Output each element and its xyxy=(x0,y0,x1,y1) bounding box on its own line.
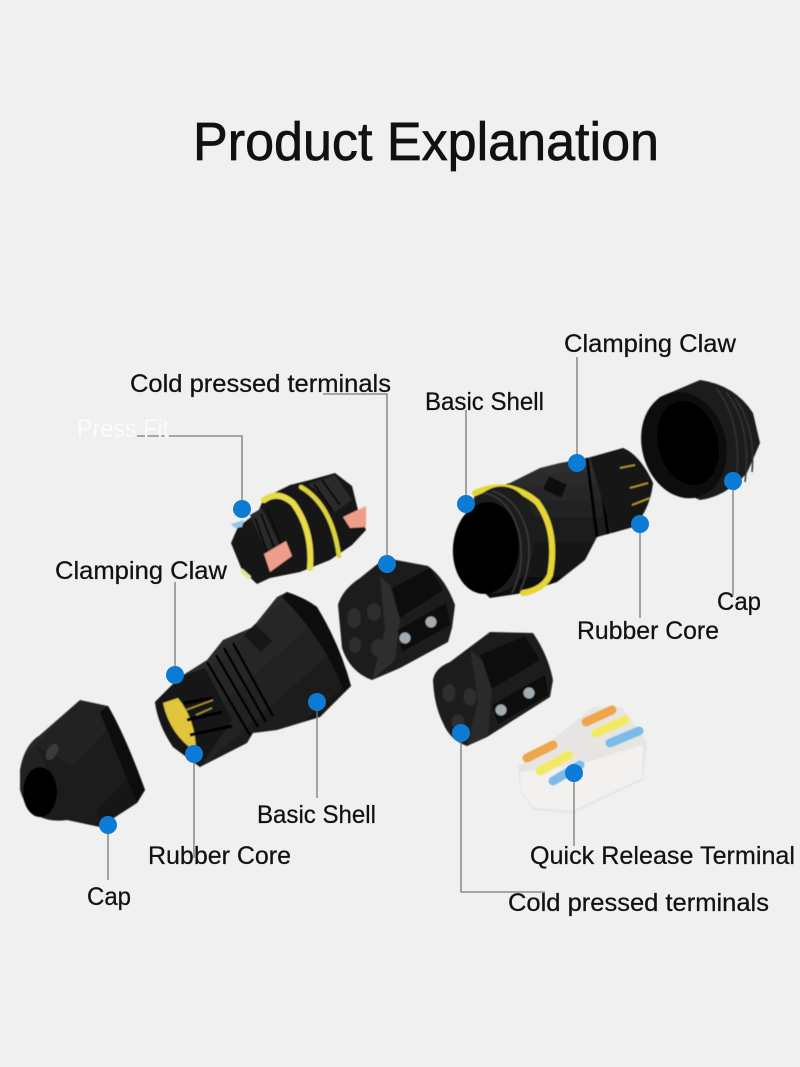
label: cold pressed terminals upper: Cold pressed terminals xyxy=(130,370,391,398)
part: cold pressed terminal core lower xyxy=(433,632,553,746)
label: press fit: Press Fit xyxy=(77,415,169,443)
leader lines xyxy=(108,357,733,892)
part: basic shell lower left xyxy=(155,592,351,767)
label: clamping claw left: Clamping Claw xyxy=(55,557,228,585)
label: clamping claw right: Clamping Claw xyxy=(564,330,737,358)
part: press-fit connector xyxy=(231,473,366,584)
title: Product Explanation xyxy=(193,112,659,172)
part: cold pressed terminal core upper xyxy=(338,558,455,680)
label: cap left: Cap xyxy=(87,883,131,911)
label: cap right: Cap xyxy=(717,588,761,616)
label: rubber core left: Rubber Core xyxy=(148,842,291,870)
label: cold pressed terminals lower: Cold pressed terminals xyxy=(508,889,769,917)
callout dots xyxy=(99,454,742,834)
part: cap upper right xyxy=(629,380,760,508)
label: basic shell left: Basic Shell xyxy=(257,801,376,829)
part: cap lower left xyxy=(20,700,145,827)
label: basic shell right: Basic Shell xyxy=(425,388,544,416)
press-fit yellow seal rings xyxy=(264,487,339,568)
part: basic shell upper right xyxy=(449,448,653,600)
shell yellow seal ring xyxy=(475,487,552,593)
label: quick release terminal: Quick Release Terminal xyxy=(530,842,795,870)
label: rubber core right: Rubber Core xyxy=(577,617,719,645)
part: quick release terminal xyxy=(518,707,647,813)
